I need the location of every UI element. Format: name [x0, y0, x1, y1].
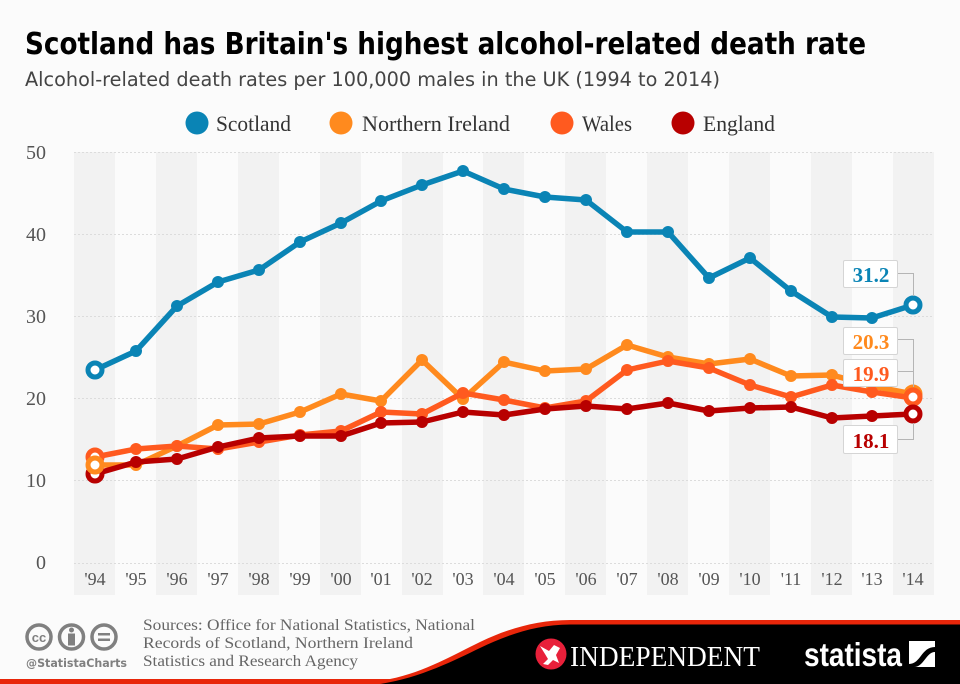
x axis labels: '97 — [207, 569, 229, 589]
line: England — [88, 397, 920, 481]
x axis labels: '12 — [821, 569, 843, 589]
subtitle: Alcohol-related death rates per 100,000 males in the UK (1994 to 2014) — [25, 68, 720, 91]
x axis labels — [84, 569, 924, 589]
x axis labels: '09 — [698, 569, 720, 589]
source note — [143, 617, 476, 670]
line: Scotland — [88, 165, 920, 377]
x axis labels: '10 — [739, 569, 761, 589]
first-year marker: Northern Ireland — [88, 458, 102, 472]
source note: Records of Scotland, Northern Ireland — [143, 635, 413, 652]
x axis labels: '06 — [575, 569, 597, 589]
x axis labels: '08 — [657, 569, 679, 589]
x axis labels: '13 — [861, 569, 883, 589]
footer swoosh — [0, 620, 960, 684]
icon: Creative Commons licence: cc — [32, 630, 46, 645]
callout: Northern Ireland 20.3 — [844, 328, 914, 387]
y axis labels: 0 — [36, 552, 46, 574]
x axis labels: '07 — [616, 569, 638, 589]
source note: Statistics and Research Agency — [143, 653, 358, 670]
x axis labels: '95 — [125, 569, 147, 589]
x axis labels: '98 — [248, 569, 270, 589]
callout: Wales 19.9 — [844, 360, 914, 386]
x axis labels: '94 — [84, 569, 106, 589]
y axis labels: 30 — [26, 306, 46, 328]
callout: Northern Ireland 20.3: 20.3 — [853, 330, 889, 354]
logo: Statista: statista — [804, 636, 903, 673]
legend: Scotland — [216, 111, 291, 136]
x axis labels: '00 — [330, 569, 352, 589]
legend: Northern Ireland — [362, 111, 510, 136]
callout: England 18.1 — [844, 423, 914, 454]
handle: @StatistaCharts — [26, 656, 127, 670]
x axis labels: '03 — [452, 569, 474, 589]
y axis labels: 10 — [26, 470, 46, 492]
legend — [186, 111, 775, 136]
callout: Scotland 31.2: 31.2 — [853, 263, 889, 287]
legend: Wales — [582, 111, 632, 136]
x axis labels: '14 — [902, 569, 924, 589]
x axis labels: '05 — [534, 569, 556, 589]
y axis labels: 40 — [26, 224, 46, 246]
x axis labels: '99 — [289, 569, 311, 589]
x axis labels: '11 — [781, 569, 801, 589]
x axis labels: '96 — [166, 569, 188, 589]
callout: Scotland 31.2 — [844, 260, 914, 296]
x axis labels: '01 — [370, 569, 392, 589]
y axis labels: 20 — [26, 388, 46, 410]
icon: Creative Commons licence — [27, 625, 116, 649]
y axis labels: 50 — [26, 142, 46, 164]
logo: The Independent: INDEPENDENT — [570, 642, 760, 673]
callout: England 18.1: 18.1 — [853, 429, 889, 453]
callout: Wales 19.9: 19.9 — [853, 362, 889, 386]
alternating year bands — [74, 152, 934, 595]
legend: England — [703, 111, 775, 136]
y axis labels — [26, 142, 46, 574]
source note: Sources: Office for National Statistics, National — [143, 617, 476, 634]
x axis labels: '04 — [493, 569, 515, 589]
x axis labels: '02 — [411, 569, 433, 589]
line: Northern Ireland — [95, 339, 920, 471]
line: Wales — [88, 355, 920, 464]
